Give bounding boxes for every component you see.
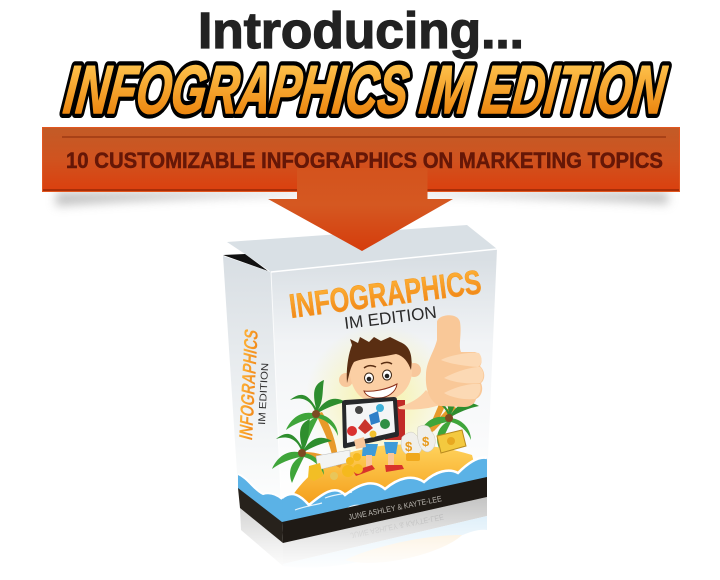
spine title: INFOGRAPHICS <box>236 327 263 442</box>
box reflection <box>236 495 492 575</box>
box subtitle: IM EDITION <box>343 303 438 333</box>
character ears <box>339 373 353 387</box>
illustration glow <box>305 325 455 475</box>
black band front <box>282 477 487 543</box>
island <box>293 445 476 505</box>
character hand on tablet <box>354 437 366 449</box>
box front face <box>271 249 497 525</box>
money bags and banknotes <box>401 425 466 456</box>
wave highlights <box>282 458 487 505</box>
product box <box>223 225 497 543</box>
black band spine <box>238 488 283 543</box>
box title: INFOGRAPHICS <box>287 263 483 326</box>
character legs and shoes <box>353 442 404 476</box>
box top face <box>227 225 497 272</box>
banner shadow <box>56 192 668 206</box>
money bags and banknotes: $ <box>422 434 430 449</box>
box spine <box>223 256 283 522</box>
gold coins and truck <box>308 450 420 481</box>
box reflection: JUNE ASHLEY & KAYTE-LEE <box>350 512 444 540</box>
palm trees <box>272 380 479 483</box>
author credit: JUNE ASHLEY & KAYTE-LEE <box>348 494 442 522</box>
down arrow <box>268 168 453 251</box>
tablet <box>342 397 399 448</box>
banner text: 10 CUSTOMIZABLE INFOGRAPHICS ON MARKETING TOPICS <box>66 148 663 173</box>
heading: Introducing: Introducing... <box>198 2 524 59</box>
thumbs-up hand <box>398 315 484 410</box>
banner <box>42 128 680 192</box>
box open flap <box>223 254 268 271</box>
character eyes <box>364 362 392 383</box>
character hair <box>347 337 412 383</box>
water on front <box>282 458 487 523</box>
character <box>339 315 484 476</box>
money bags and banknotes: $ <box>405 439 413 454</box>
character smile <box>364 384 397 398</box>
character shirt <box>385 400 405 440</box>
water on spine <box>238 474 283 523</box>
character face <box>349 349 412 402</box>
spine subtitle: IM EDITION <box>257 363 271 425</box>
